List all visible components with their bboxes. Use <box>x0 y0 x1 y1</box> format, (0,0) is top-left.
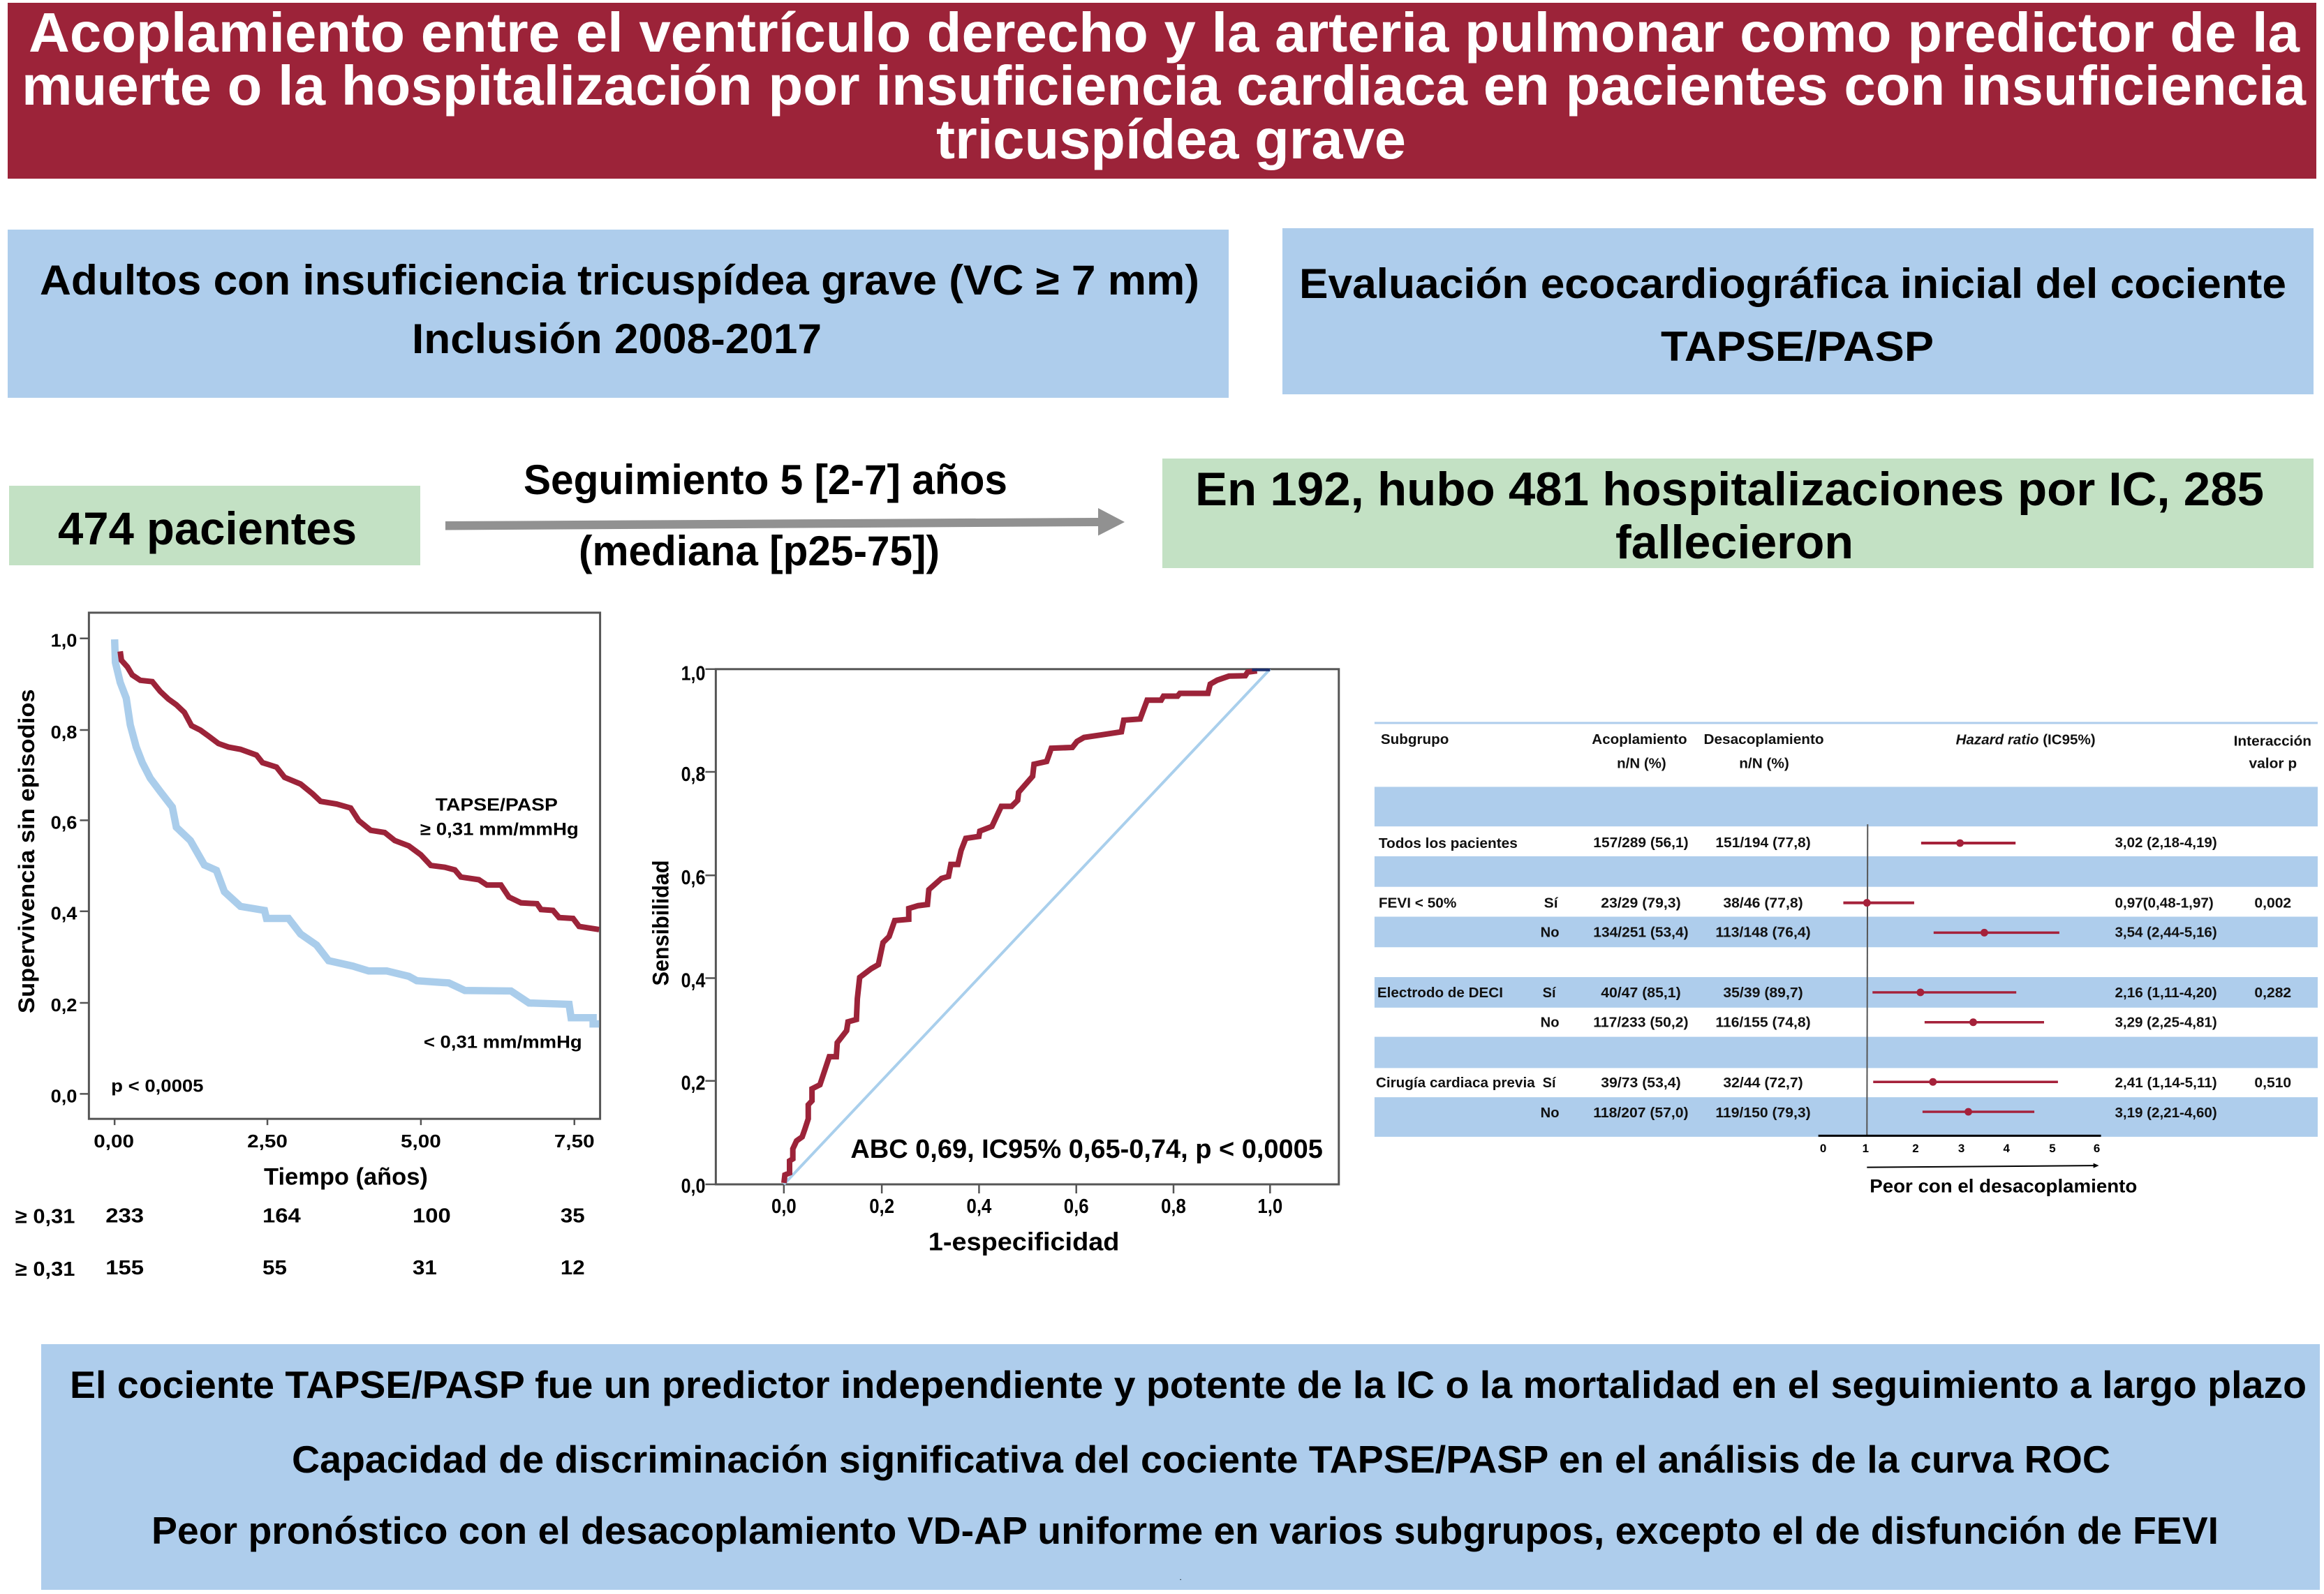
row: prior surgery yes: 0,510 <box>2254 1075 2291 1091</box>
title banner: muerte o la hospitalización por insuficiencia cardiaca en pacientes con insuficiencia <box>22 54 2307 117</box>
numbers at risk: 55 <box>262 1257 287 1279</box>
forest x axis: 0 <box>1820 1142 1826 1155</box>
row: ICD lead no <box>1541 1015 2217 1031</box>
numbers at risk: 35 <box>561 1205 585 1227</box>
curve: low ratio <box>114 639 599 1024</box>
KM labels <box>111 795 582 1096</box>
row: LVEF yes: 0,002 <box>2254 896 2291 911</box>
numbers at risk <box>15 1205 585 1281</box>
row: prior surgery no: 119/150 (79,3) <box>1715 1105 1811 1121</box>
row: prior surgery no: 3,19 (2,21-4,60) <box>2115 1105 2217 1121</box>
panel: echocardiographic evaluation <box>1282 228 2314 394</box>
KM y axis labels: 1,0 <box>51 632 77 651</box>
row: ICD lead yes: 0,282 <box>2254 985 2291 1001</box>
row: prior surgery yes: Sí <box>1543 1075 1557 1091</box>
panel: conclusions: . <box>1180 1575 1181 1581</box>
ROC x axis labels: 0,6 <box>1064 1196 1089 1218</box>
row: all patients: 3,02 (2,18-4,19) <box>2115 835 2217 851</box>
row: all patients: 151/194 (77,8) <box>1715 835 1811 851</box>
ROC x axis labels: 0,8 <box>1161 1196 1186 1218</box>
forest x axis: 4 <box>2004 1142 2011 1155</box>
row: ICD lead yes: 35/39 (89,7) <box>1723 985 1803 1001</box>
panel: echocardiographic evaluation: TAPSE/PASP <box>1661 323 1934 370</box>
panel: population: Inclusión 2008-2017 <box>412 315 822 362</box>
forest x axis: 2 <box>1912 1142 1919 1155</box>
row: LVEF yes <box>1379 896 2291 911</box>
row: prior surgery yes: Cirugía cardiaca previa <box>1376 1075 1536 1091</box>
reference diagonal <box>784 669 1270 1184</box>
ROC x axis labels: 1,0 <box>1257 1196 1282 1218</box>
KM x axis labels: 5,00 <box>401 1132 441 1152</box>
table header: n/N (%) <box>1739 757 1789 772</box>
ROC x axis labels: 0,4 <box>967 1196 991 1218</box>
title banner <box>8 1 2316 179</box>
chart: forest plot table <box>1375 722 2318 1196</box>
KM x axis labels: 2,50 <box>247 1132 288 1152</box>
KM x axis labels: 7,50 <box>554 1132 595 1152</box>
row: LVEF yes: 23/29 (79,3) <box>1601 896 1681 911</box>
row: prior surgery no: No <box>1541 1105 1560 1121</box>
table header: n/N (%) <box>1617 757 1666 772</box>
ROC y axis labels: 0,4 <box>681 969 705 992</box>
row: LVEF no: 134/251 (53,4) <box>1593 925 1689 940</box>
numbers at risk: ≥ 0,31 <box>15 1205 75 1228</box>
title banner: Acoplamiento entre el ventrículo derecho y la arteria pulmonar como predictor de la <box>29 1 2300 64</box>
KM y axis labels: 0,2 <box>51 996 77 1015</box>
panel: outcomes <box>1162 459 2314 569</box>
ROC curve <box>784 671 1257 1183</box>
panel: 474 patients: 474 pacientes <box>58 502 357 554</box>
forest x axis: 6 <box>2094 1142 2100 1155</box>
KM labels: p < 0,0005 <box>111 1076 204 1096</box>
ROC top end <box>1252 669 1270 671</box>
KM labels: ≥ 0,31 mm/mmHg <box>420 819 579 839</box>
row: LVEF yes: FEVI < 50% <box>1379 896 1457 911</box>
KM labels: TAPSE/PASP <box>436 795 558 814</box>
reference line at HR 1 <box>1866 824 1868 1135</box>
row: ICD lead yes: 2,16 (1,11-4,20) <box>2115 985 2217 1001</box>
table header: Hazard ratio (IC95%) <box>1956 733 2096 748</box>
row: all patients: 157/289 (56,1) <box>1593 835 1689 851</box>
forest axis caption: Peor con el desacoplamiento <box>1870 1175 2137 1196</box>
row: prior surgery yes: 32/44 (72,7) <box>1723 1075 1803 1091</box>
table header <box>1381 732 2311 772</box>
panel: conclusions: Peor pronóstico con el desacoplamiento VD-AP uniforme en varios subgrupos, excepto el de disfunción de FEVI <box>151 1509 2219 1552</box>
ROC y axis labels: 0,2 <box>681 1073 705 1095</box>
numbers at risk: 100 <box>413 1205 451 1227</box>
ROC x axis title: 1-especificidad <box>928 1228 1119 1256</box>
ROC y axis labels: 0,0 <box>681 1175 705 1198</box>
row: ICD lead yes: Sí <box>1543 985 1557 1001</box>
panel: conclusions <box>41 1344 2320 1590</box>
row: LVEF yes: 0,97(0,48-1,97) <box>2115 896 2214 911</box>
forest x axis: 5 <box>2049 1142 2056 1155</box>
numbers at risk: 31 <box>413 1257 437 1279</box>
numbers at risk: ≥ 0,31 <box>15 1258 75 1281</box>
KM y axis labels <box>51 632 77 1106</box>
row: ICD lead yes: 40/47 (85,1) <box>1601 985 1681 1001</box>
row: prior surgery yes <box>1376 1075 2291 1091</box>
row: ICD lead no: No <box>1541 1015 1560 1031</box>
ROC y axis labels: 1,0 <box>681 663 705 685</box>
row: ICD lead yes <box>1377 985 2291 1001</box>
numbers at risk: 233 <box>105 1205 144 1227</box>
row: LVEF no <box>1541 925 2217 940</box>
row: LVEF yes: Sí <box>1544 896 1559 911</box>
row: ICD lead yes: Electrodo de DECI <box>1377 985 1503 1001</box>
table header: Acoplamiento <box>1592 732 1687 747</box>
table header: valor p <box>2249 757 2297 772</box>
KM y axis labels: 0,0 <box>51 1087 77 1106</box>
KM labels: < 0,31 mm/mmHg <box>424 1033 582 1052</box>
panel: conclusions: Capacidad de discriminación significativa del cociente TAPSE/PASP en el análisis de la curva ROC <box>292 1438 2110 1481</box>
panel: echocardiographic evaluation: Evaluación ecocardiográfica inicial del cociente <box>1299 260 2286 307</box>
ROC x axis labels: 0,2 <box>869 1196 894 1218</box>
KM x axis labels: 0,00 <box>94 1132 134 1152</box>
ROC x axis labels <box>771 1196 1282 1218</box>
KM x axis title: Tiempo (años) <box>264 1164 428 1191</box>
ROC y axis labels <box>681 663 705 1198</box>
forest x axis: 1 <box>1863 1142 1869 1155</box>
table header: Interacción <box>2234 734 2311 750</box>
numbers at risk: 12 <box>561 1257 585 1279</box>
panel: outcomes: fallecieron <box>1615 516 1853 569</box>
KM x axis labels <box>94 1132 595 1152</box>
row: LVEF no: 3,54 (2,44-5,16) <box>2115 925 2217 940</box>
row: ICD lead no: 116/155 (74,8) <box>1715 1015 1811 1031</box>
KM y axis title: Supervivencia sin episodios <box>13 689 39 1013</box>
panel: conclusions: El cociente TAPSE/PASP fue un predictor independiente y potente de la IC o la mortalidad en el seguimiento a largo plazo <box>70 1363 2307 1406</box>
row: LVEF no: 113/148 (76,4) <box>1715 925 1811 940</box>
follow-up text top: Seguimiento 5 [2-7] años <box>524 456 1007 503</box>
table header: Desacoplamiento <box>1703 732 1824 747</box>
follow-up text bottom: (mediana [p25-75]) <box>579 528 940 574</box>
panel: population <box>8 230 1229 398</box>
panel: 474 patients <box>9 486 420 565</box>
row: LVEF yes: 38/46 (77,8) <box>1723 896 1803 911</box>
chart: ROC curve <box>648 663 1339 1256</box>
arrow: follow-up <box>445 508 1125 536</box>
row: ICD lead no: 117/233 (50,2) <box>1593 1015 1689 1031</box>
numbers at risk: 164 <box>262 1205 301 1227</box>
KM y axis labels: 0,8 <box>51 723 77 743</box>
ROC y axis labels: 0,6 <box>681 867 705 889</box>
ROC x axis labels: 0,0 <box>771 1196 797 1218</box>
row: LVEF no: No <box>1541 925 1560 940</box>
forest x axis <box>1819 1135 2101 1155</box>
KM y axis labels: 0,6 <box>51 813 77 833</box>
numbers at risk: 155 <box>105 1257 144 1279</box>
AUC annotation: ABC 0,69, IC95% 0,65-0,74, p < 0,0005 <box>850 1135 1323 1164</box>
row: prior surgery yes: 39/73 (53,4) <box>1601 1075 1681 1091</box>
curve: high ratio <box>120 651 599 930</box>
ROC y axis title: Sensibilidad <box>648 860 674 985</box>
ROC y axis labels: 0,8 <box>681 764 705 786</box>
arrow: worse with uncoupling <box>1867 1163 2099 1168</box>
row: prior surgery no <box>1541 1105 2217 1121</box>
panel: population: Adultos con insuficiencia tricuspídea grave (VC ≥ 7 mm) <box>40 257 1199 304</box>
forest x axis: 3 <box>1958 1142 1964 1155</box>
row: all patients: Todos los pacientes <box>1379 836 1518 851</box>
row: ICD lead no: 3,29 (2,25-4,81) <box>2115 1015 2217 1031</box>
KM y axis labels: 0,4 <box>51 904 77 924</box>
row: all patients <box>1379 835 2217 851</box>
row: prior surgery no: 118/207 (57,0) <box>1593 1105 1689 1121</box>
panel: outcomes: En 192, hubo 481 hospitalizaciones por IC, 285 <box>1195 463 2264 516</box>
chart: Kaplan-Meier survival <box>13 613 600 1281</box>
table header: Subgrupo <box>1381 732 1449 747</box>
row: prior surgery yes: 2,41 (1,14-5,11) <box>2115 1075 2217 1091</box>
title banner: tricuspídea grave <box>936 108 1406 170</box>
